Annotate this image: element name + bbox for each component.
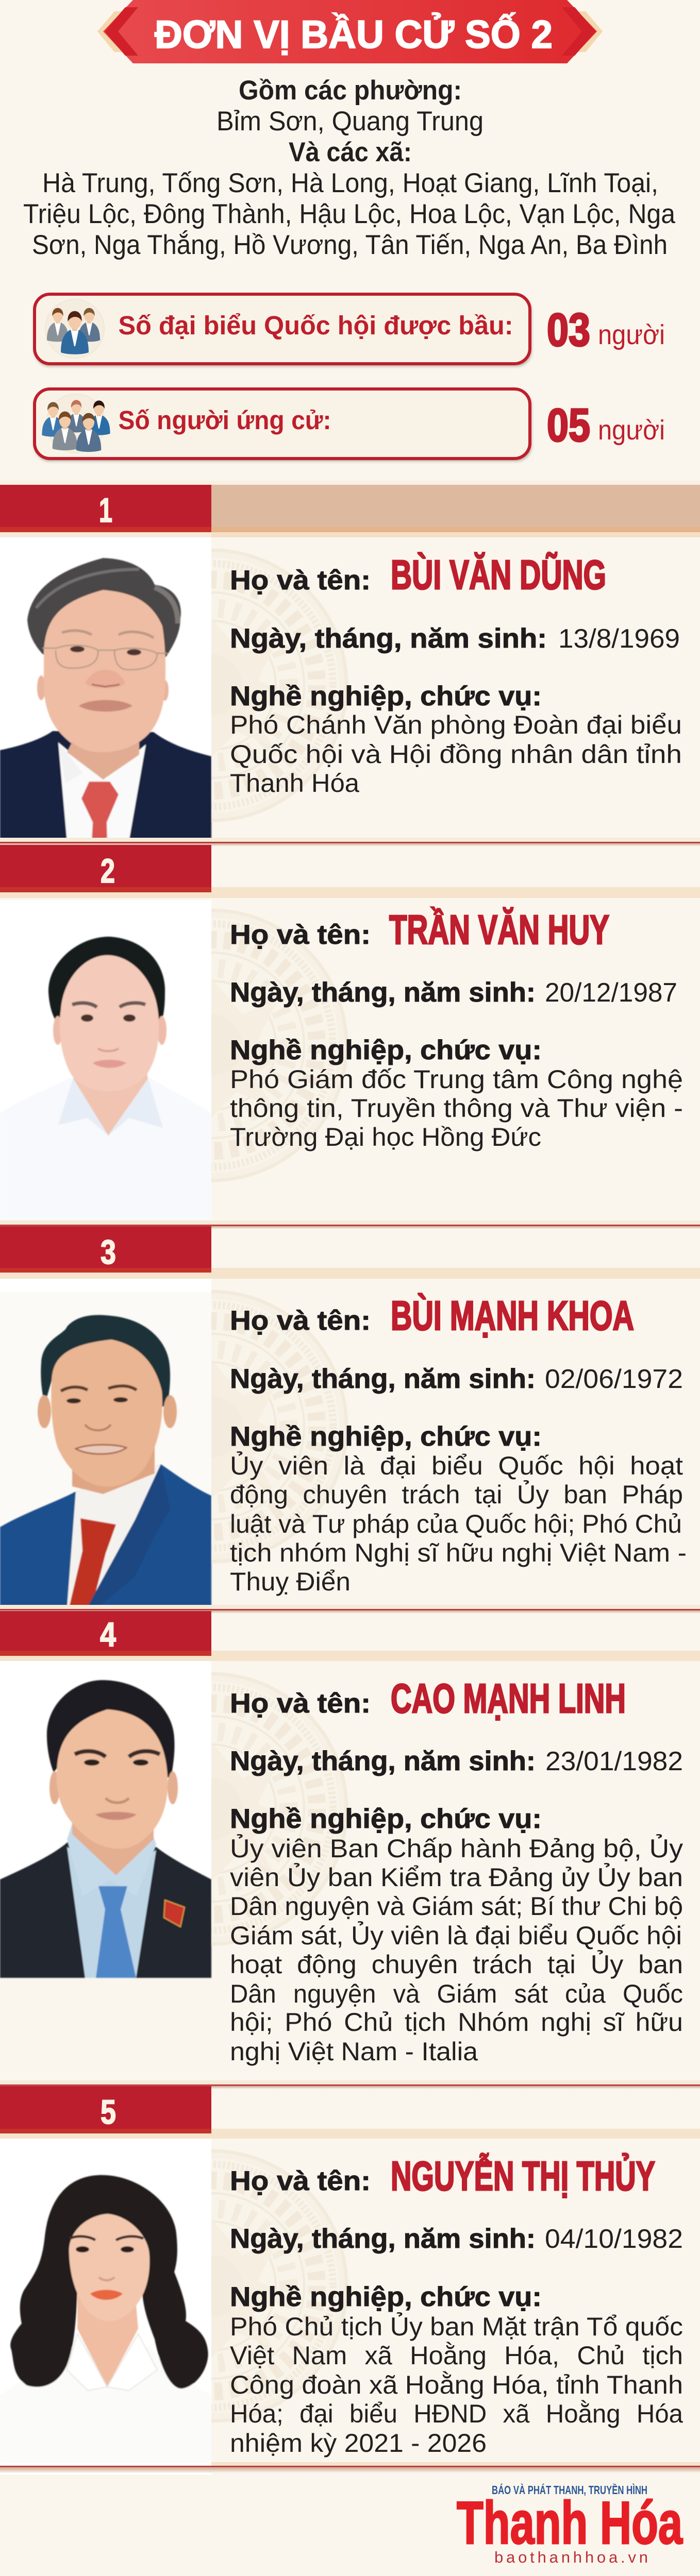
portrait: Bùi Mạnh Khoa [0,1279,211,1607]
portrait: Trần Văn Huy [0,900,211,1219]
panel: candidate 4 [0,1661,683,2066]
portrait: Bùi Văn Dũng [0,537,211,842]
candidate details: Nghề nghiệp, chức vụ: [230,1421,542,1452]
section bar 3: 3 [101,1233,116,1271]
stat box: number of candidates [35,389,531,461]
list of wards and communes: Bỉm Sơn, Quang Trung [216,106,484,137]
list of wards and communes: Và các xã: [289,137,412,167]
icon: group of three people [47,308,100,354]
candidate details: luật và Tư pháp của Quốc hội; Phó Chủ [230,1510,682,1538]
list of wards and communes: Hà Trung, Tống Sơn, Hà Long, Hoạt Giang, Lĩnh Toại, [42,168,658,198]
count: 03 people: 03 [547,304,590,356]
candidate details [230,552,682,798]
section bar 2 [0,838,700,898]
panel: candidate 1 [0,537,682,842]
candidate details: Trường Đại học Hồng Đức [230,1123,541,1151]
count: 05 people: người [598,415,665,446]
panel: candidate 3 [0,1279,687,1607]
section bar 3 [0,1221,700,1279]
footer logo: BÁO VÀ PHÁT THANH, TRUYỀN HÌNH [492,2483,647,2497]
candidate details: Quốc hội và Hội đồng nhân dân tỉnh [230,740,682,769]
candidate details: Thanh Hóa [230,769,359,798]
candidate details: Ngày, tháng, năm sinh: [230,1364,536,1394]
panel: candidate 2 [0,900,683,1219]
candidate details: Thuỵ Điển [230,1567,351,1596]
candidate details: Ủy viên là đại biểu Quốc hội hoạt [230,1451,683,1480]
stat box: number of candidates: Số người ứng cử: [119,405,331,435]
portrait: Nguyễn Thị Thủy [0,2139,211,2475]
section bar 5: 5 [101,2093,116,2131]
candidate details: Họ và tên: [230,920,371,950]
candidate details: 23/01/1982 [545,1747,683,1776]
candidate details: hội; Phó Chủ tịch Nhóm nghị sĩ hữu [230,2008,683,2037]
candidate details: Nghề nghiệp, chức vụ: [230,1804,542,1834]
candidate details [230,907,683,1151]
candidate details: Họ và tên: [230,1306,371,1336]
candidate details: Ngày, tháng, năm sinh: [230,623,547,654]
drum watermark [211,909,348,1182]
portrait: Cao Mạnh Linh [0,1661,211,1978]
candidate details: Hóa; đại biểu HĐND xã Hoằng Hóa [230,2399,683,2428]
count: 03 people: người [598,319,665,350]
candidate details: Nghề nghiệp, chức vụ: [230,2282,542,2312]
list of wards and communes: Sơn, Nga Thắng, Hồ Vương, Tân Tiến, Nga An, Ba Đình [32,230,668,260]
candidate details: Phó Chánh Văn phòng Đoàn đại biểu [230,710,682,739]
candidate details: Ngày, tháng, năm sinh: [230,1746,536,1776]
candidate details: Công đoàn xã Hoằng Hóa, tỉnh Thanh [230,2370,683,2399]
stat box: number of deputies: Số đại biểu Quốc hội được bầu: [119,311,513,340]
candidate details: BÙI VĂN DŨNG [391,552,606,598]
footer logo: baothanhhoa.vn [494,2548,648,2566]
candidate details: nhiệm kỳ 2021 - 2026 [230,2429,487,2458]
candidate details: 04/10/1982 [545,2224,683,2254]
candidate details: Họ và tên: [230,565,371,596]
candidate details: thông tin, Truyền thông và Thư viện - [230,1094,683,1123]
list of wards and communes [23,75,675,260]
panel: candidate 5 [0,2139,683,2475]
candidate details: Dân nguyện và Giám sát; Bí thư Chi bộ [230,1892,683,1921]
section bar 1 [0,481,700,537]
candidate details: Ủy viên Ban Chấp hành Đảng bộ, Ủy [230,1834,683,1863]
candidate details: Dân nguyện và Giám sát của Quốc [230,1979,683,2008]
drum watermark [211,1672,348,1946]
candidate details: 02/06/1972 [545,1364,683,1394]
candidate details: Họ và tên: [230,2166,371,2196]
closing rule [0,2462,700,2473]
drum watermark [211,549,348,822]
title banner [97,0,603,63]
candidate details: Việt Nam xã Hoằng Hóa, Chủ tịch [230,2341,683,2370]
candidate details: Phó Chủ tịch Ủy ban Mặt trận Tổ quốc [230,2312,683,2341]
candidate details [230,1293,687,1596]
candidate details: Nghề nghiệp, chức vụ: [230,681,542,711]
list of wards and communes: Gồm các phường: [239,75,462,106]
candidate details: Giám sát, Ủy viên là đại biểu Quốc hội [230,1921,682,1950]
candidate details [230,2153,683,2458]
section bar 4: 4 [100,1615,116,1653]
icon: group of five people [42,400,110,452]
candidate details: 13/8/1969 [558,624,680,654]
section bar 2: 2 [101,852,115,890]
drum watermark [211,2149,348,2423]
candidate details [230,1675,683,2066]
candidate details: Họ và tên: [230,1688,371,1719]
section bar 4 [0,1605,700,1661]
candidate details: Nghề nghiệp, chức vụ: [230,1035,542,1065]
candidate details: động chuyên trách tại Ủy ban Pháp [230,1480,683,1509]
drum watermark [211,1290,348,1564]
count: 05 people: 05 [547,400,590,451]
section bar 5 [0,2080,700,2139]
title banner: ĐƠN VỊ BẦU CỬ SỐ 2 [155,13,553,57]
candidate details: Phó Giám đốc Trung tâm Công nghệ [230,1065,683,1094]
candidate details: nghị Việt Nam - Italia [230,2037,478,2066]
candidate details: 20/12/1987 [545,978,677,1008]
candidate details: Ngày, tháng, năm sinh: [230,2224,536,2254]
candidate details: tịch nhóm Nghị sĩ hữu nghị Việt Nam - [230,1538,687,1567]
list of wards and communes: Triệu Lộc, Đông Thành, Hậu Lộc, Hoa Lộc, Vạn Lộc, Nga [23,199,675,229]
candidate details: TRẦN VĂN HUY [389,907,609,953]
candidate details: Ngày, tháng, năm sinh: [230,977,536,1008]
candidate details: viên Ủy ban Kiểm tra Đảng ủy Ủy ban [230,1862,683,1892]
count: 03 people [547,304,665,356]
stat box: number of deputies [35,294,531,366]
candidate details: hoạt động chuyên trách tại Ủy ban [230,1950,683,1979]
section bar 1: 1 [99,491,112,529]
count: 05 people [547,400,665,451]
